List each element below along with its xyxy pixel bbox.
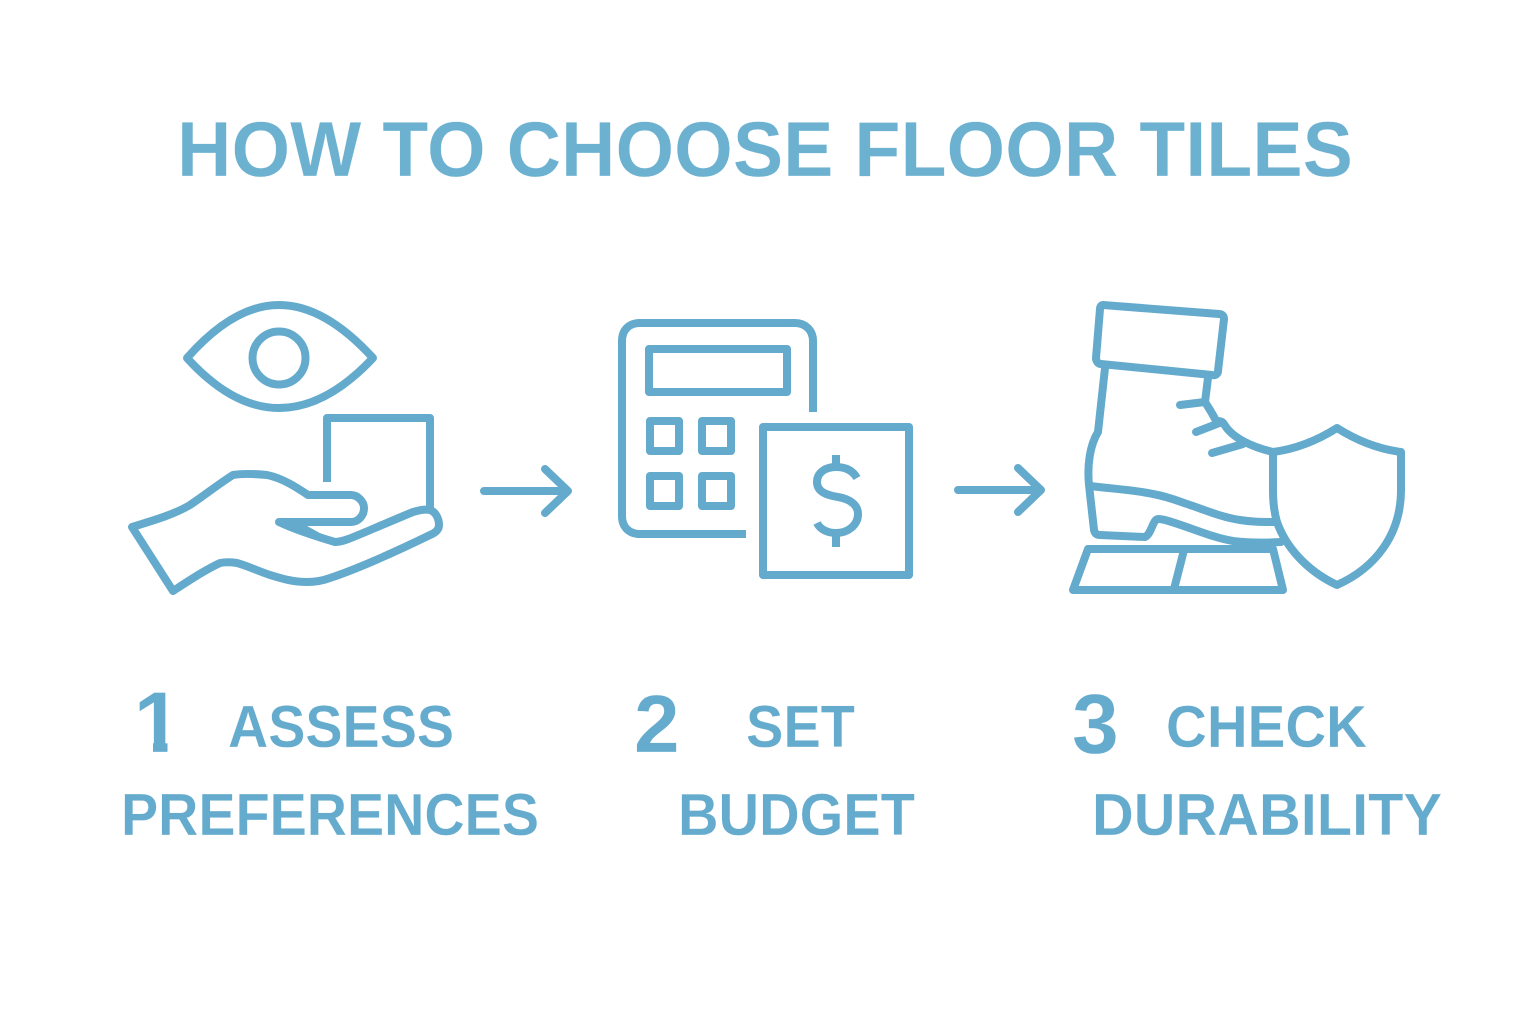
boot upper and sole [1088,368,1281,543]
step 1 label: PREFERENCES [121,782,539,848]
step 3 number: 3 [1072,677,1119,771]
boot welt [1090,486,1274,522]
icon: calculator with dollar tile [622,323,909,575]
eye outline [187,305,373,408]
step 2 label: BUDGET [678,782,915,848]
dollar sign [817,455,858,547]
arrow: step 2 to step 3 [958,468,1041,512]
calculator screen [649,349,787,392]
boot laces [1180,402,1243,453]
floor tile [1073,549,1283,590]
boot cuff [1096,305,1224,375]
sole contact wedge [1235,544,1272,548]
dollar tile [763,427,909,575]
step 1 number: 1 [134,675,181,771]
finger crease wedge [283,523,325,537]
hand [132,474,439,591]
eye iris [252,332,306,384]
step 1 label [121,694,539,848]
boot tongue and toe [1205,378,1273,452]
tile held in hand [327,418,430,509]
step 3 label: DURABILITY [1092,782,1442,848]
step 2 label [678,694,915,848]
step 1 label: ASSESS [228,694,454,760]
title: HOW TO CHOOSE FLOOR TILES [177,105,1353,193]
calculator body [622,323,813,534]
step 3 label: CHECK [1166,694,1367,760]
step 2 label: SET [746,694,855,760]
arrow: step 1 to step 2 [484,469,568,513]
shield [1273,428,1401,585]
step 3 label [1092,694,1442,848]
icon: eye over hand holding tile [132,305,439,591]
step 2 number: 2 [634,679,680,770]
calculator buttons [650,421,731,506]
icon: boot on tile with shield [1073,305,1401,590]
